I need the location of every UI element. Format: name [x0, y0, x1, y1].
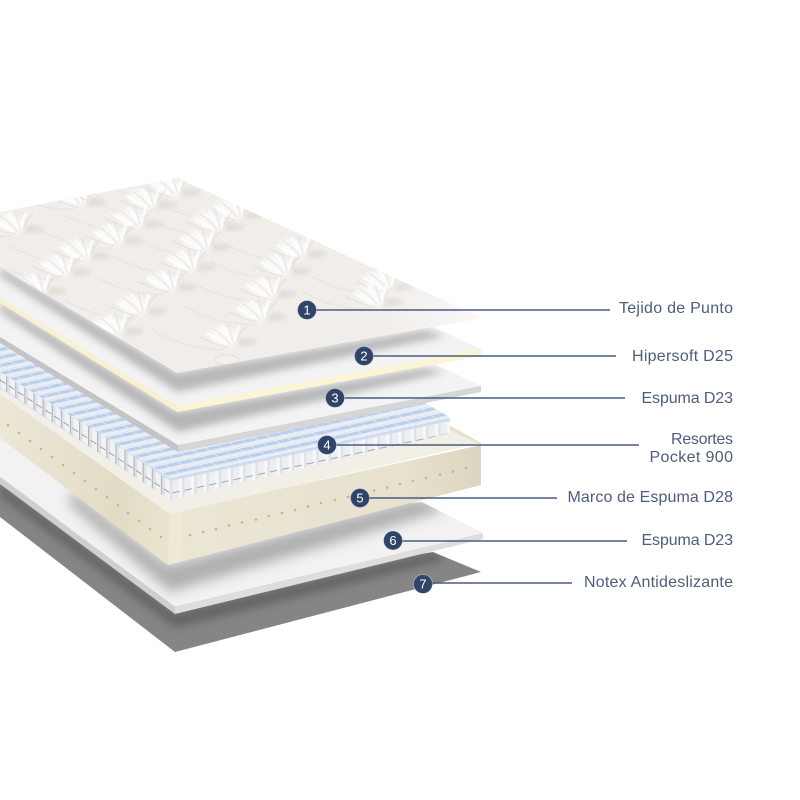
layer 6 side: [0, 477, 175, 614]
springs left side: [0, 372, 170, 500]
callout 3: Espuma D23: 3: [331, 390, 339, 406]
callout 5: Marco de Espuma D28: [350, 488, 733, 508]
layer 3 side: [0, 337, 178, 452]
callout 4: Resortes Pocket 900: Pocket 900: [650, 449, 733, 466]
quilting tufts: [0, 173, 414, 365]
callout 2: Hipersoft D25: Hipersoft D25: [632, 348, 733, 365]
frame right face: [168, 445, 481, 565]
callout 6: Espuma D23: Espuma D23: [642, 532, 733, 549]
callout 4: Resortes Pocket 900: [318, 431, 733, 466]
springs right side: [170, 417, 450, 500]
frame left face: [0, 393, 170, 565]
callout 1: Tejido de Punto: Tejido de Punto: [619, 300, 733, 317]
layer 3: foam D23: [0, 290, 481, 452]
callout 5: Marco de Espuma D28: Marco de Espuma D28: [568, 489, 733, 506]
callout 6: Espuma D23: 6: [389, 533, 397, 548]
frame holes, left face: [7, 424, 162, 538]
callout 4: Resortes Pocket 900: 4: [323, 438, 331, 452]
callout 6: Espuma D23: [384, 531, 733, 550]
layer 5: foam frame D28: [0, 385, 481, 565]
callout 7: Notex Antideslizante: 7: [419, 576, 427, 592]
callout 3: Espuma D23: [326, 388, 733, 408]
layer 2: Hipersoft D25: [0, 267, 481, 412]
frame top rim: [0, 385, 481, 514]
callout 4: Resortes Pocket 900: Resortes: [671, 431, 733, 448]
callout 2: Hipersoft D25: [354, 346, 733, 366]
layer 1: quilted knit: [0, 170, 490, 380]
frame holes, right face: [189, 467, 467, 536]
frame corner strip: [168, 510, 183, 565]
layer 2 cream side: [0, 298, 177, 412]
callout 5: Marco de Espuma D28: 5: [356, 490, 364, 506]
callout 1: Tejido de Punto: [298, 300, 733, 320]
callout 7: Notex Antideslizante: Notex Antideslizante: [584, 574, 733, 591]
mattress layers infographic: [0, 178, 732, 652]
layer 4: pocket springs: [0, 330, 450, 500]
springs top: [0, 330, 450, 478]
callout 1: Tejido de Punto: 1: [303, 302, 311, 318]
callout 3: Espuma D23: Espuma D23: [642, 390, 733, 407]
layer 7: non-slip base: [0, 470, 481, 652]
callout 2: Hipersoft D25: 2: [360, 348, 368, 364]
callout 7: Notex Antideslizante: [414, 574, 733, 594]
layer 6: foam D23: [0, 438, 483, 614]
